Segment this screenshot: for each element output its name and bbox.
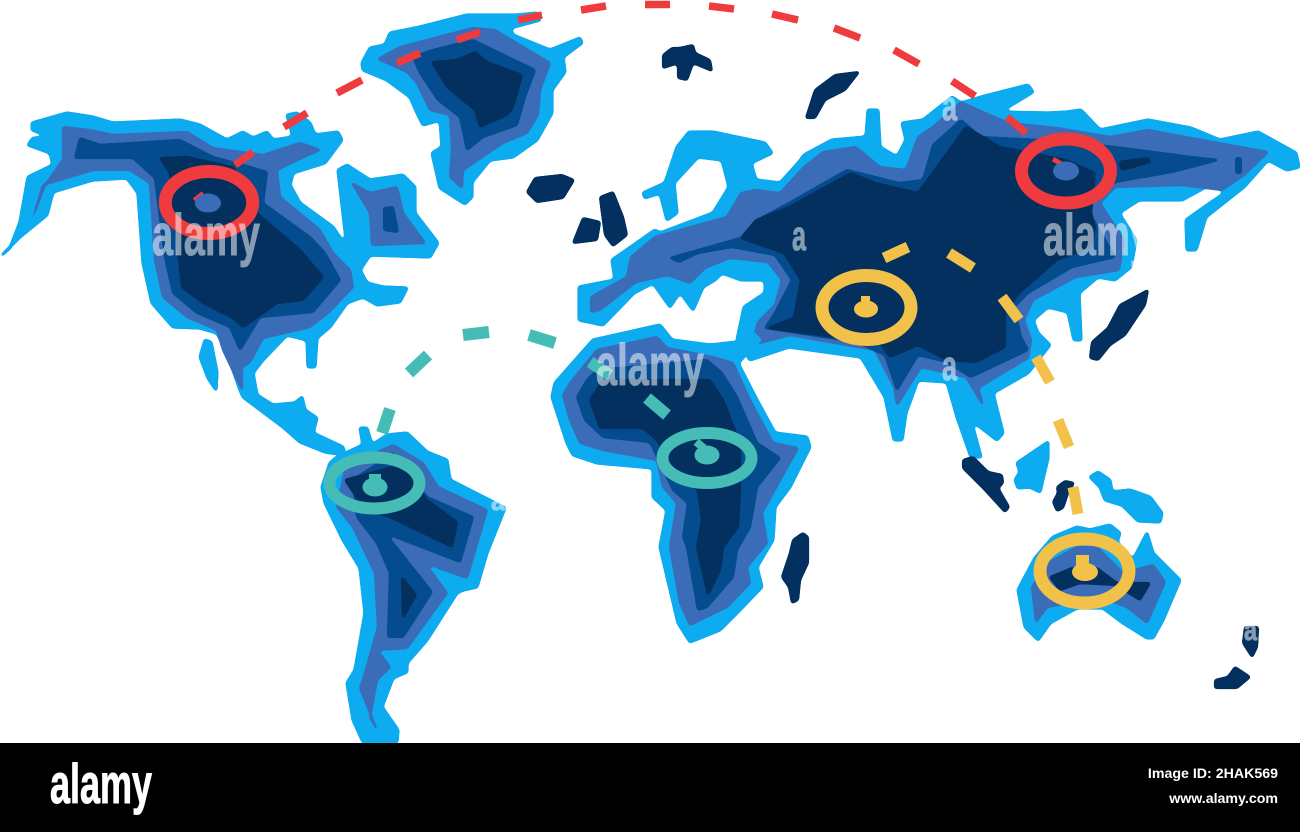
marker: yellow ring Australia	[1040, 539, 1129, 603]
watermark overlay: a	[491, 485, 505, 516]
footer bar	[0, 743, 1300, 832]
continent: North America	[2, 113, 438, 455]
continent: Greenland	[362, 13, 582, 204]
watermark overlay	[152, 82, 1257, 647]
watermark overlay: a	[942, 342, 957, 389]
watermark overlay: a	[942, 82, 957, 129]
continent: South America	[322, 428, 505, 742]
watermark overlay: alamy	[1043, 203, 1151, 268]
marker: yellow ring Asia	[822, 276, 911, 340]
continent: Africa	[552, 325, 810, 642]
watermark overlay: a	[792, 212, 806, 259]
watermark overlay: a	[1244, 614, 1257, 647]
website: www.alamy.com	[1168, 791, 1278, 807]
islands: light blue	[1015, 442, 1162, 522]
marker: red ring North America	[165, 172, 253, 234]
continent: Australia	[1018, 525, 1180, 640]
route: teal dashed arc	[382, 332, 667, 433]
islands: dark navy	[527, 45, 1258, 688]
image id: Image ID: 2HAK569	[1148, 766, 1278, 782]
continent: Eurasia	[579, 85, 1299, 457]
watermark overlay: alamy	[596, 333, 704, 398]
marker: red ring Asia	[1022, 139, 1110, 203]
footer logo: alamy	[50, 752, 152, 815]
watermark overlay: alamy	[152, 203, 260, 268]
route: yellow dashed arc	[884, 247, 1078, 514]
route: red dashed arc	[194, 4, 1063, 200]
marker: teal ring South America	[330, 458, 420, 508]
marker: teal ring Africa	[662, 433, 752, 483]
